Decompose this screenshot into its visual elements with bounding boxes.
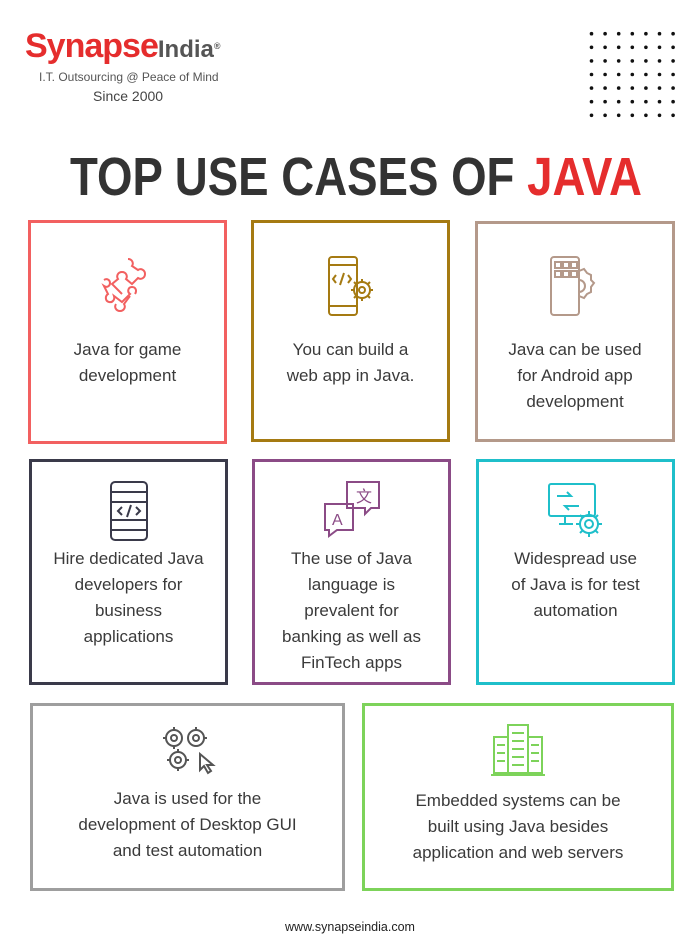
logo [25, 27, 220, 104]
icon: phone with code [110, 481, 148, 541]
logo: SynapseIndia® [25, 27, 220, 65]
icon: gears and cursor [163, 727, 216, 774]
text: development [79, 366, 176, 385]
text [286, 340, 414, 385]
logo: I.T. Outsourcing @ Peace of Mind [39, 70, 219, 84]
text: banking as well as [282, 627, 421, 646]
text: Embedded systems can be [415, 791, 621, 810]
text [508, 340, 642, 411]
panel: business applications [29, 459, 228, 685]
text: Java is used for the [114, 789, 261, 808]
panel: banking [252, 459, 451, 685]
text: FinTech apps [301, 653, 402, 672]
icon: server racks [491, 724, 545, 776]
text: Hire dedicated Java [53, 549, 204, 568]
text: developers for [75, 575, 182, 594]
dot grid decoration [590, 32, 675, 118]
text: web app in Java. [287, 366, 414, 385]
text: The use of Java [291, 549, 412, 568]
icon: phone with app grid and gear [550, 256, 596, 316]
text: automation [533, 601, 618, 620]
text: Widespread use [514, 549, 637, 568]
text: applications [84, 627, 173, 646]
text: business [95, 601, 162, 620]
icon: puzzle [102, 258, 146, 312]
text: Java can be used [508, 340, 642, 359]
text [511, 549, 640, 620]
icon: translation bubbles [324, 481, 380, 538]
text: language is [308, 575, 395, 594]
text: for Android app [517, 366, 633, 385]
icon: monitor with gear [548, 483, 602, 537]
icon: translation bubbles: 文 [356, 483, 372, 507]
text: built using Java besides [428, 817, 608, 836]
logo: Since 2000 [93, 88, 163, 104]
panel: web app [251, 220, 450, 442]
text [74, 340, 181, 385]
icon: phone with code and gear [328, 256, 373, 316]
text: and test automation [113, 841, 262, 860]
panel: desktop GUI [30, 703, 345, 891]
text: prevalent for [304, 601, 399, 620]
text [53, 549, 204, 646]
text: You can build a [293, 340, 408, 359]
panel: embedded systems [362, 703, 674, 891]
panel: test automation [476, 459, 675, 685]
title: TOP USE CASES OF JAVA [70, 147, 642, 207]
panel: game development [28, 220, 227, 444]
text: Java for game [74, 340, 181, 359]
panel: android [475, 221, 675, 442]
text: development [526, 392, 624, 411]
text [78, 789, 297, 860]
text: of Java is for test [511, 575, 640, 594]
text: application and web servers [413, 843, 623, 862]
text [282, 549, 421, 672]
icon: translation bubbles: A [332, 512, 342, 529]
text: development of Desktop GUI [78, 815, 297, 834]
footer url: www.synapseindia.com [285, 920, 415, 934]
text [413, 791, 623, 862]
